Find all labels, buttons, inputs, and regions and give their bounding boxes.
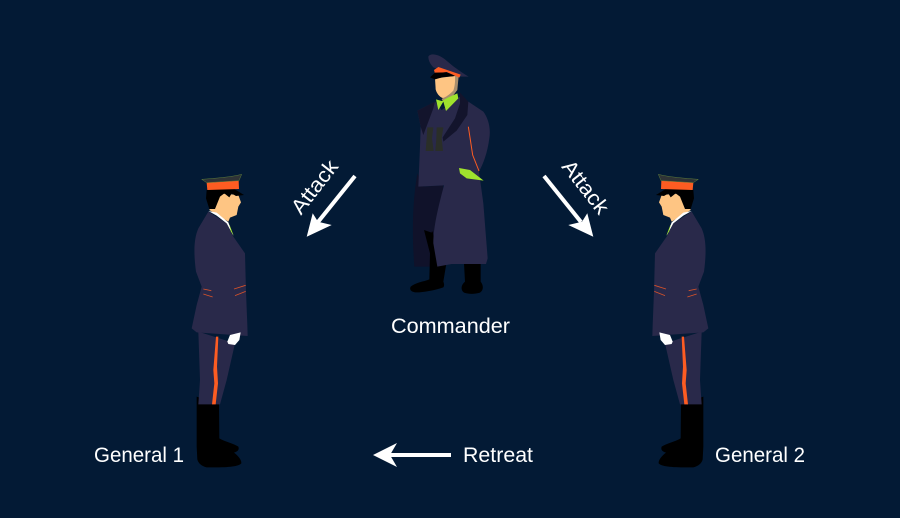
general 2 coat — [652, 212, 708, 336]
label: Attack right: Attack — [557, 156, 614, 219]
commander visor — [430, 72, 455, 79]
general 1 belt piping — [203, 285, 246, 297]
general 2 belt piping — [654, 285, 697, 297]
label: Commander: Commander — [391, 315, 510, 338]
commander coat — [417, 97, 490, 267]
commander left lapel — [417, 102, 435, 135]
commander binoculars — [426, 127, 443, 151]
commander lapel — [443, 93, 468, 142]
figure: general 2 — [652, 174, 708, 467]
general 2 trousers — [665, 332, 702, 404]
label: General 1: General 1 — [94, 444, 184, 467]
general 2 cap top — [658, 174, 698, 183]
general 1 trouser stripe — [212, 337, 218, 404]
arrow shaft — [318, 176, 355, 222]
commander left boot — [410, 230, 447, 292]
commander coat back — [413, 173, 443, 267]
arrow: attack to general 1 — [307, 176, 355, 237]
general 1 glove — [227, 332, 241, 345]
label: Retreat: Retreat — [463, 444, 533, 467]
commander collar — [436, 93, 458, 111]
general 2 shirt collar — [667, 211, 692, 236]
arrow head — [307, 213, 332, 237]
commander inner coat — [423, 185, 443, 233]
arrow head — [373, 443, 397, 467]
commander cap — [428, 54, 469, 77]
label: General 2: General 2 — [715, 444, 805, 467]
commander right boot — [462, 263, 483, 294]
figure: commander — [410, 54, 490, 294]
general 1 trousers — [198, 332, 235, 404]
arrow: retreat — [373, 443, 451, 467]
general 2 trouser stripe — [682, 337, 688, 404]
general 2 boots — [659, 397, 703, 467]
general 1 shirt collar — [208, 211, 233, 236]
arrow shaft — [544, 176, 581, 222]
general 2 hair — [656, 188, 694, 209]
label: Attack left: Attack — [287, 155, 343, 219]
general 1 face — [209, 193, 241, 222]
general 1 boots — [197, 397, 241, 467]
general 2 glove — [659, 332, 673, 345]
general 1 tie — [229, 224, 234, 236]
general 1 cap band — [207, 181, 239, 190]
commander cap band — [434, 67, 461, 78]
commander face — [435, 76, 455, 98]
general 2 tie — [666, 224, 671, 236]
commander neck — [442, 75, 459, 101]
arrow shaft — [388, 453, 451, 457]
general 1 hair — [206, 188, 244, 209]
commander pocket — [459, 168, 484, 181]
arrow head — [568, 213, 593, 237]
figure: general 1 — [192, 174, 248, 467]
arrow: attack to general 2 — [544, 176, 593, 237]
commander coat piping — [468, 127, 479, 171]
general 1 coat — [192, 212, 248, 336]
general 1 cap top — [202, 174, 242, 183]
general 2 face — [659, 193, 691, 222]
general 2 cap band — [661, 181, 693, 190]
